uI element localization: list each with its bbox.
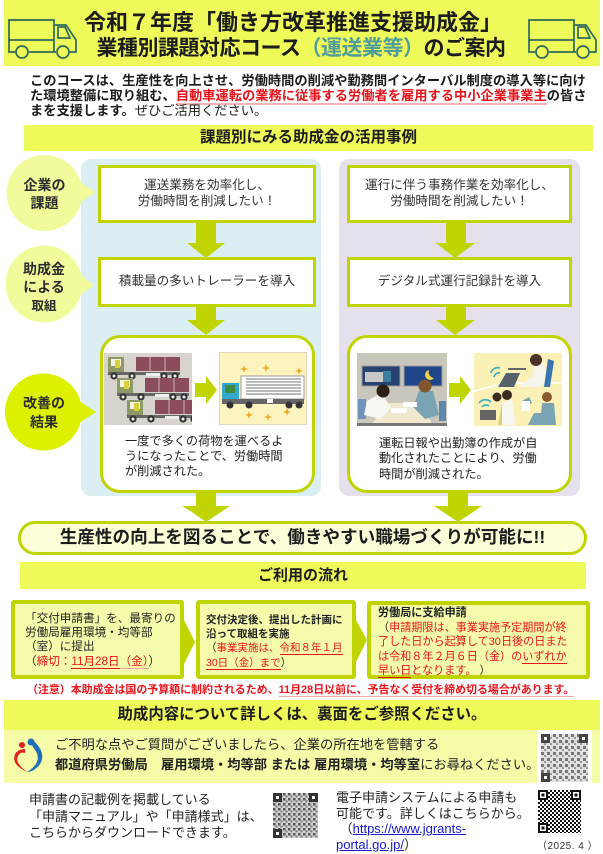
text: left result: うになったことで、労働時間 (125, 449, 283, 463)
text: manual download (29, 792, 263, 840)
icon: truck left (8, 19, 77, 59)
text: electronic application: 可能です。詳しくはこちらから。 (336, 806, 530, 821)
date note: （2025. 4 ） (537, 841, 598, 852)
arrows: green connectors (182, 223, 482, 521)
icon: ministry logo (14, 738, 42, 772)
flow box 3: 労働局に支給申請 (378, 607, 467, 619)
text: right result: 運転日報や出勤簿の作成が自 (379, 436, 537, 450)
illustration: office at night (357, 353, 447, 426)
box: left action: 積載量の多いトレーラーを導入 (119, 274, 295, 288)
flow box 2 (196, 600, 356, 679)
box: left issue: 運送業務を効率化し、 (144, 178, 270, 192)
box: right action (347, 257, 572, 307)
box: left issue (98, 165, 316, 223)
banner: productivity conclusion: 生産性の向上を図ることで、働きやすい職場づくりが可能に!! (60, 527, 545, 547)
circle: subsidy action: 取組 (31, 299, 56, 313)
text: electronic application: （https://www.jgrants- (340, 821, 466, 836)
contact text (55, 737, 539, 772)
flow box 1: （室）に提出 (25, 640, 95, 653)
circle: improvement result (5, 374, 96, 450)
section heading: flow: ご利用の流れ (258, 567, 348, 584)
text: left result: が削減された。 (125, 464, 210, 478)
text: electronic application: 電子申請システムによる申請も (336, 790, 517, 805)
panel: purple case (339, 159, 580, 496)
contact panel (4, 730, 600, 783)
intro text: た環境整備に取り組む、自動車運転の業務に従事する労働者を雇用する中小企業事業主の皆さ (30, 88, 587, 103)
illustration: big truck (219, 352, 307, 425)
circle: improvement result: 結果 (30, 414, 58, 430)
box: left issue: 労働時間を削減したい！ (138, 194, 276, 208)
illustration: digital office (474, 353, 562, 426)
box: left action (98, 257, 316, 307)
QR: contact (537, 730, 592, 786)
panel: right result (347, 335, 572, 493)
contact text: ご不明な点やご質問がございましたら、企業の所在地を管轄する (55, 737, 439, 752)
circle: subsidy action: による (23, 279, 65, 295)
flow box 3: （申請期限は、事業実施予定期間が終 (378, 622, 567, 634)
banner: see reverse: 助成内容について詳しくは、裏面をご参照ください。 (118, 706, 486, 723)
icon: truck right (528, 19, 597, 59)
contact text: 都道府県労働局 雇用環境・均等部 または 雇用環境・均等室にお尋ねください。 (55, 757, 539, 772)
flow box 2: （事業実施は、令和８年１月 (206, 642, 342, 654)
flow box 1: （締切：11月28日（金）） (25, 655, 160, 668)
circle: subsidy action: 助成金 (23, 261, 65, 277)
circle: improvement result: 改善の (23, 395, 65, 411)
notice: （注意）本助成金は国の予算額に制約されるため、11月28日以前に、予告なく受付を締め切る場合があります。 (27, 684, 574, 696)
title line 2: 業種別課題対応コース（運送業等）のご案内 (97, 37, 505, 60)
flow box 2: 沿って取組を実施 (206, 628, 289, 640)
flow box 3: 了した日から起算して30日後の日また (378, 636, 568, 648)
circle: company issue: 企業の (24, 177, 66, 193)
flow box 3 (367, 601, 590, 679)
flow box 2: 30日（金）まで） (206, 657, 291, 669)
illustration: sleepy trucks (104, 353, 192, 425)
section heading: examples (24, 125, 593, 151)
text: right result: 時間が削減された。 (379, 467, 489, 481)
panel: blue case (81, 159, 321, 496)
flow box 2: 交付決定後、提出した計画に (206, 614, 342, 626)
banner: productivity conclusion (18, 521, 587, 555)
flow box 3: 早い日となります。 ） (378, 665, 491, 677)
text: manual download: こちらからダウンロードできます。 (29, 825, 236, 840)
intro text (30, 73, 587, 118)
text: electronic application: portal.go.jp/） (336, 837, 417, 852)
box: right action: デジタル式運行記録計を導入 (378, 274, 541, 288)
circle: subsidy action (6, 246, 94, 322)
flow box 1: 労働局雇用環境・均等部 (25, 626, 153, 639)
flow box 1 (11, 600, 184, 679)
banner: see reverse (4, 700, 600, 730)
text: manual download: 申請書の記載例を掲載している (29, 792, 211, 807)
text: electronic application (336, 790, 530, 852)
text: left result: 一度で多くの荷物を運べるよ (125, 434, 283, 448)
arrow: left result (195, 376, 217, 404)
box: right issue: 労働時間を削減したい！ (390, 194, 529, 208)
text: right result (379, 436, 537, 481)
circle: company issue: 課題 (30, 195, 58, 211)
flow arrows (184, 620, 367, 664)
box: right issue (347, 165, 572, 223)
section heading: examples: 課題別にみる助成金の活用事例 (200, 129, 417, 146)
section heading: flow (20, 562, 586, 589)
text: right result: 動化されたことにより、労働 (379, 451, 537, 465)
text: manual download: 「申請マニュアル」や「申請様式」は、 (29, 808, 263, 824)
circle: company issue (6, 155, 96, 231)
arrow: right result (449, 376, 471, 404)
flow box 1: 「交付申請書」を、最寄りの (25, 612, 176, 625)
panel: left result (100, 335, 315, 493)
QR: jgrants (538, 790, 581, 833)
intro text: このコースは、生産性を向上させ、労働時間の削減や勤務間インターバル制度の導入等に向け (30, 73, 586, 88)
box: right issue: 運行に伴う事務作業を効率化し、 (365, 178, 554, 192)
QR: manual (273, 793, 318, 838)
title line 1: 令和７年度「働き方改革推進支援助成金」 (84, 10, 502, 35)
header band (4, 0, 600, 66)
flow box 3: は令和８年２月６日（金）のいずれか (378, 651, 567, 663)
intro text: まを支援します。ぜひご活用ください。 (30, 103, 267, 118)
text: left result (125, 434, 283, 478)
